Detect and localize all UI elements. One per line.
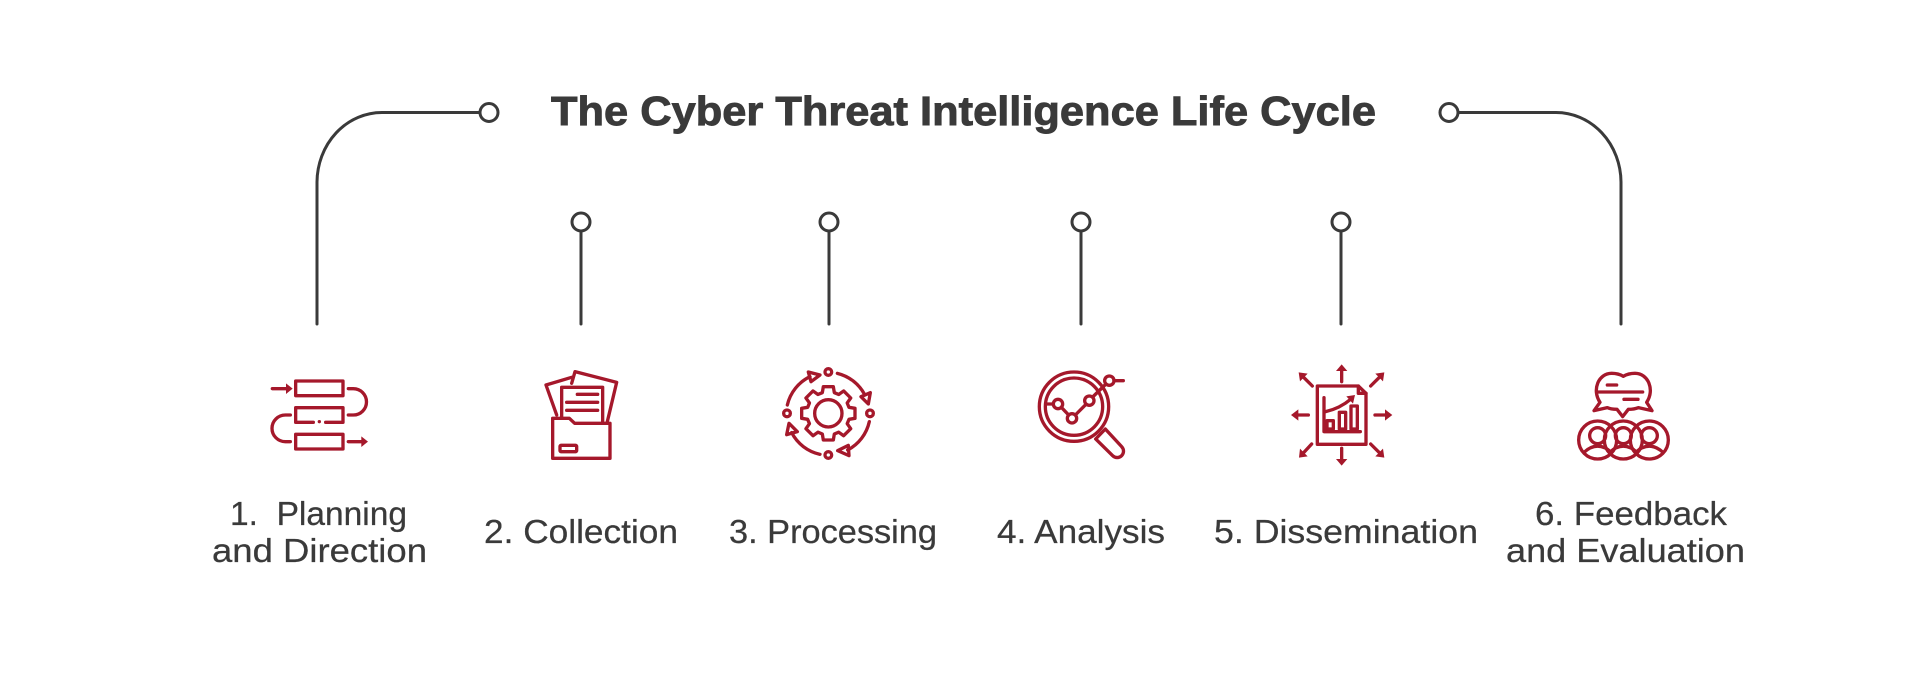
label: step 2: 2. Collection [484,513,678,550]
label: step 6: and Evaluation [1506,532,1745,569]
icon: processing gear [784,369,873,458]
label: step 6: 6. Feedback [1535,495,1728,532]
connector: step 3 [820,213,838,324]
label: step 1: and Direction [212,532,427,569]
label: step 5: 5. Dissemination [1214,513,1478,550]
icon: report dissemination [1291,364,1392,466]
label: step 6 [1506,495,1745,569]
label: step 1 [212,495,427,569]
connector: left bracket to step 1 [317,104,498,324]
icon: document folder [546,372,617,458]
connector: right bracket to step 6 [1440,104,1621,324]
connector: step 2 [572,213,590,324]
icon: magnifier analysis [1039,372,1124,458]
connector: step 4 [1072,213,1090,324]
connector: step 5 [1332,213,1350,324]
label: step 3: 3. Processing [729,513,937,550]
icon: team feedback [1579,373,1668,459]
title: The Cyber Threat Intelligence Life Cycle [551,88,1376,134]
icon: planning flow [272,381,368,449]
label: step 4: 4. Analysis [997,513,1165,550]
label: step 1: 1. Planning [230,495,407,532]
